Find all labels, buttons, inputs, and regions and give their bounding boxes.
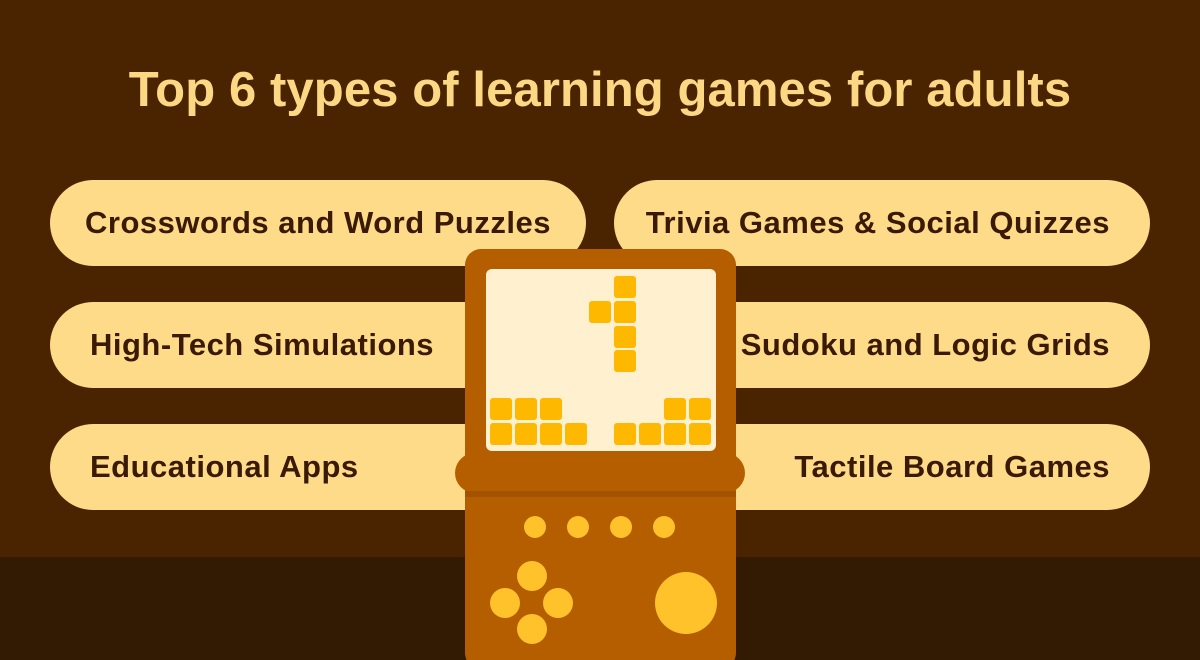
pill: simulations bbox=[50, 302, 586, 388]
pill: sudoku bbox=[614, 302, 1150, 388]
pill: simulations: High-Tech Simulations bbox=[90, 327, 434, 362]
screen bbox=[486, 269, 716, 451]
pill: board games bbox=[614, 424, 1150, 510]
pill: trivia bbox=[614, 180, 1150, 266]
pill: educational apps: Educational Apps bbox=[90, 449, 359, 484]
pill: trivia: Trivia Games & Social Quizzes bbox=[646, 205, 1110, 240]
pill: crosswords: Crosswords and Word Puzzles bbox=[85, 205, 551, 240]
pill: educational apps bbox=[50, 424, 586, 510]
pill: board games: Tactile Board Games bbox=[794, 449, 1110, 484]
buttons bbox=[490, 516, 717, 644]
pill: crosswords bbox=[50, 180, 586, 266]
title: Top 6 types of learning games for adults bbox=[129, 63, 1071, 117]
pill: sudoku: Sudoku and Logic Grids bbox=[741, 327, 1110, 362]
